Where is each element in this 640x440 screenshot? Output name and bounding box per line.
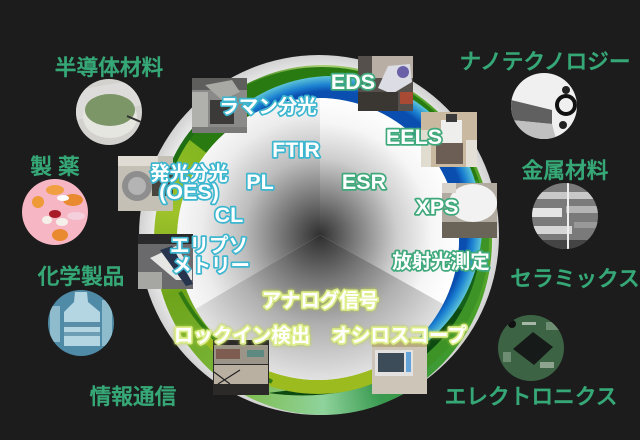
label: オシロスコープ: オシロスコープ (331, 325, 467, 347)
photo circle: metal materials (532, 183, 598, 249)
photo: lock-in amplifier (213, 340, 269, 395)
label: ラマン分光: ラマン分光 (219, 96, 317, 118)
label: CL: CL (215, 203, 243, 227)
photo: ellipsometer (138, 234, 193, 289)
label: エリプソメトリー: メトリー (172, 255, 250, 277)
label: ロックイン検出: ロックイン検出 (174, 325, 310, 347)
photo circle: chemical bottles (48, 290, 114, 356)
label: PL: PL (246, 170, 274, 194)
photo circle: pharmaceutical pills (22, 179, 88, 245)
title: 金属材料: 金属材料 (522, 158, 609, 183)
label: 発光分光 (OES): (OES) (159, 180, 219, 204)
title: セラミックス: セラミックス (510, 266, 640, 291)
label: EDS: EDS (331, 70, 375, 94)
title: 化学製品: 化学製品 (38, 264, 124, 289)
photo: XPS instrument (442, 183, 497, 238)
title: ナノテクノロジー: ナノテクノロジー (459, 49, 631, 74)
photo circle: electronics circuit board (498, 315, 564, 381)
label: 発光分光 (OES): 発光分光 (150, 163, 228, 185)
label: ESR: ESR (342, 170, 387, 194)
photo circle: semiconductor wafer (76, 79, 142, 145)
label: アナログ信号: アナログ信号 (262, 289, 378, 312)
label: XPS: XPS (415, 195, 459, 219)
circular diagram (139, 55, 500, 415)
label: FTIR: FTIR (272, 138, 320, 162)
label: エリプソメトリー: エリプソ (170, 235, 248, 257)
label: EELS: EELS (386, 125, 442, 149)
inner gray disc (177, 98, 459, 380)
label: 発光分光 (OES) (150, 163, 228, 204)
title: 製薬: 製 薬 (30, 154, 80, 179)
label: エリプソメトリー (170, 235, 250, 277)
photo: EDS detector (358, 56, 413, 111)
photo: oscilloscope (372, 339, 427, 394)
photo: EELS instrument (421, 112, 477, 167)
photo: Raman instrument (192, 78, 247, 133)
title: 情報通信: 情報通信 (90, 384, 176, 409)
photo: optical emission spectrometer (118, 156, 173, 211)
title: 半導体材料: 半導体材料 (55, 55, 164, 80)
label: 放射光測定: 放射光測定 (392, 251, 490, 273)
photo circle: carbon nanotube (511, 73, 577, 139)
title: エレクトロニクス: エレクトロニクス (445, 384, 617, 409)
